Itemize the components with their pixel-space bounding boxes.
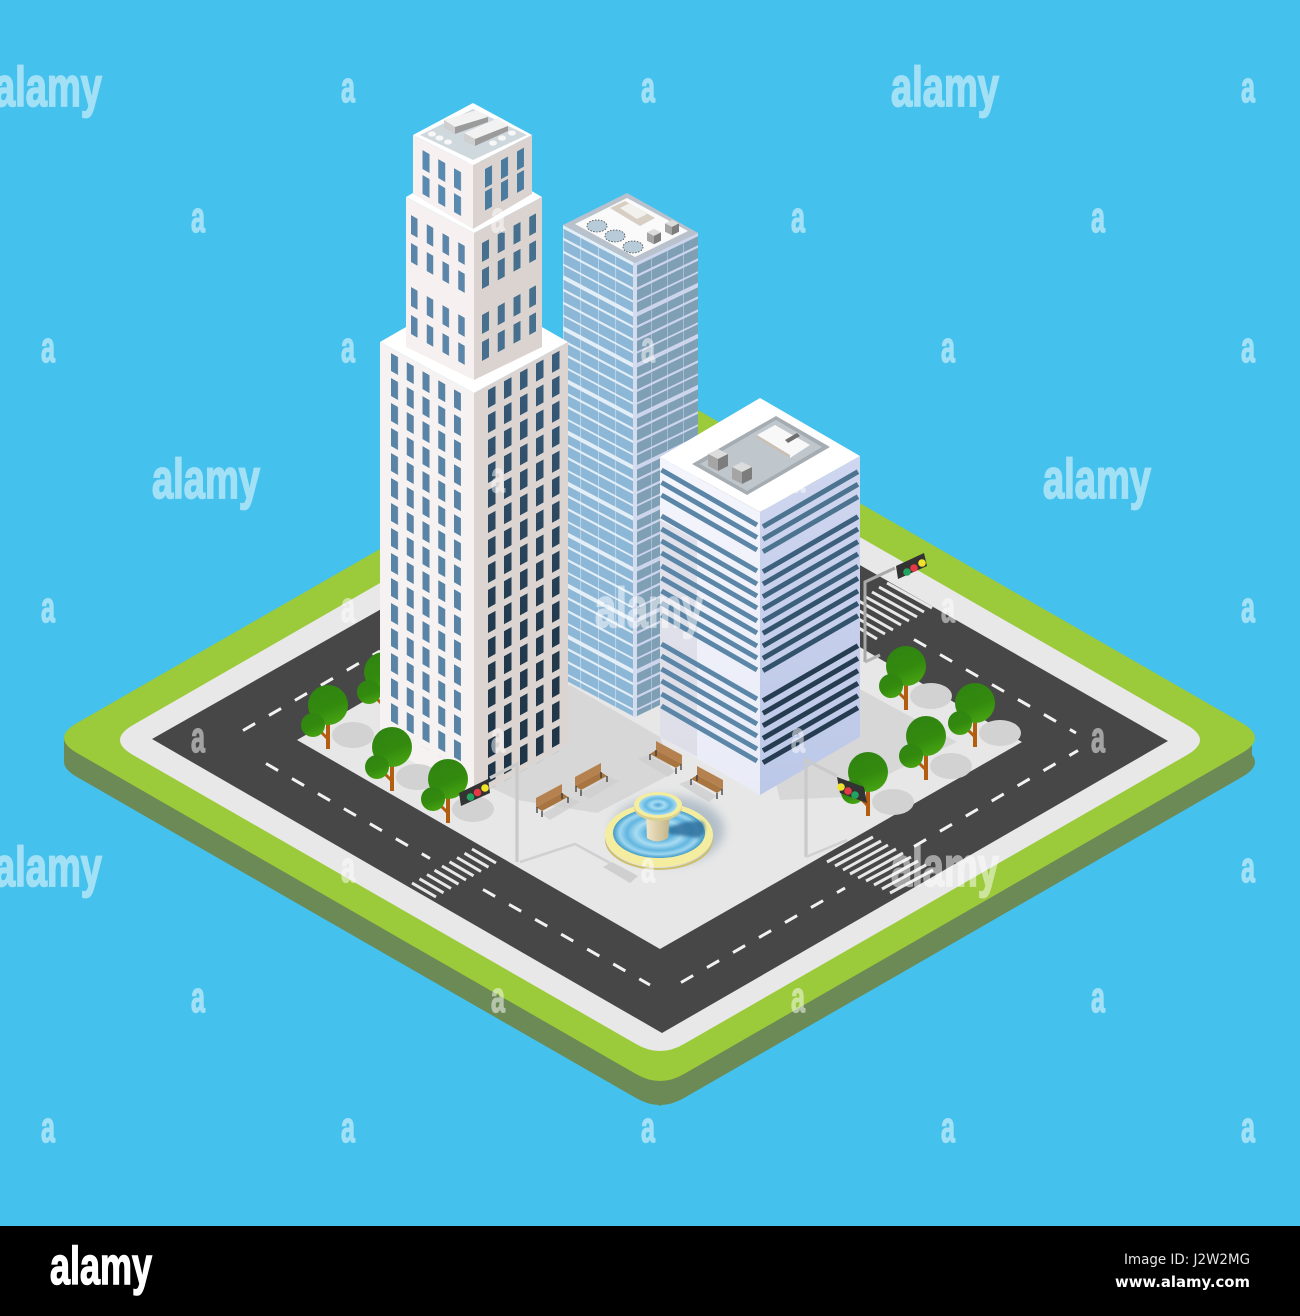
- watermark text: a: [1241, 843, 1255, 892]
- watermark text: a: [191, 193, 205, 242]
- watermark text: a: [791, 453, 805, 502]
- watermark text: a: [1241, 323, 1255, 372]
- base section right facade: [474, 342, 568, 797]
- watermark text: alamy: [891, 835, 999, 898]
- watermark text: a: [791, 713, 805, 762]
- website: www.alamy.com: [1115, 1273, 1250, 1291]
- watermark text: a: [641, 1103, 655, 1152]
- watermark text: a: [341, 63, 355, 112]
- crosswalk: south-east: [827, 837, 933, 893]
- footer logo: alamy: [50, 1237, 152, 1296]
- watermark text: a: [641, 63, 655, 112]
- watermark text: a: [341, 843, 355, 892]
- watermark text: alamy: [1043, 447, 1151, 510]
- office left stripes: [662, 470, 757, 761]
- base section right windows: [488, 350, 560, 790]
- tree 1: [301, 685, 374, 749]
- image id: Image ID: J2W2MG: [1124, 1252, 1250, 1268]
- bench 3: [638, 741, 682, 777]
- base section left facade: [380, 342, 474, 797]
- building shadows on plaza: [490, 685, 957, 813]
- watermark text: a: [491, 193, 505, 242]
- watermark text: alamy: [891, 55, 999, 118]
- bench 4: [679, 766, 723, 802]
- glass tower roof: [563, 193, 698, 263]
- glass tower left facade: [563, 225, 635, 717]
- base section left windows: [391, 353, 461, 768]
- office right facade: [760, 456, 860, 795]
- fountain: [605, 792, 724, 870]
- watermark text: a: [941, 323, 955, 372]
- watermark text: a: [41, 1103, 55, 1152]
- tree 4: [879, 646, 952, 710]
- watermark text: a: [1091, 193, 1105, 242]
- watermark text: a: [341, 323, 355, 372]
- watermark text: a: [491, 713, 505, 762]
- watermark text: a: [191, 973, 205, 1022]
- roof equipment: [428, 110, 516, 146]
- watermark text: a: [941, 583, 955, 632]
- tree 7: [841, 752, 914, 816]
- watermark text: a: [41, 583, 55, 632]
- road ring: [152, 451, 1168, 1033]
- watermark text: a: [341, 583, 355, 632]
- bench 1: [536, 784, 580, 820]
- base section roof: [380, 288, 568, 393]
- traffic light: south: [806, 760, 867, 857]
- building: tall stepped tower: [380, 103, 568, 797]
- watermark text: a: [641, 843, 655, 892]
- watermark text: a: [191, 713, 205, 762]
- watermark text: a: [1091, 973, 1105, 1022]
- traffic light: north-east: [865, 553, 927, 662]
- platform: green isometric base: [64, 395, 1255, 1106]
- watermark text: a: [1241, 63, 1255, 112]
- watermark text: a: [1241, 1103, 1255, 1152]
- watermark text: alamy: [595, 576, 703, 639]
- tree 5: [948, 683, 1021, 747]
- platform grass top: [64, 395, 1255, 1081]
- watermark text: a: [641, 323, 655, 372]
- platform side thickness: [64, 419, 1255, 1106]
- office roof: [660, 398, 860, 512]
- glass tower right facade: [635, 233, 698, 717]
- crosswalk: north-east: [834, 583, 932, 639]
- watermark text: a: [1241, 583, 1255, 632]
- office left facade: [660, 457, 760, 795]
- office right stripes: [763, 472, 858, 763]
- building: glass tower: [563, 193, 698, 717]
- upper section: [413, 103, 532, 229]
- road centre dashes: [243, 640, 1078, 985]
- watermark text: a: [491, 453, 505, 502]
- traffic light: west: [459, 764, 638, 883]
- watermark text: a: [1091, 713, 1105, 762]
- watermark text: a: [941, 1103, 955, 1152]
- watermark text: a: [791, 193, 805, 242]
- watermark text: a: [791, 973, 805, 1022]
- tree 2: [365, 727, 438, 791]
- tree 6: [899, 716, 972, 780]
- building: striped office block: [660, 398, 860, 795]
- watermark text: alamy: [152, 447, 260, 510]
- bench 2: [575, 763, 619, 799]
- watermark text: a: [491, 973, 505, 1022]
- footer bar: [0, 1226, 1300, 1316]
- central plaza: [297, 530, 1022, 949]
- outer sidewalk: [120, 429, 1200, 1051]
- tree 3: [421, 759, 494, 823]
- watermark text: a: [341, 1103, 355, 1152]
- watermark text: a: [41, 323, 55, 372]
- tree: behind tall tower: [357, 652, 430, 716]
- crosswalk: south-west: [412, 849, 496, 897]
- middle section: [406, 158, 542, 386]
